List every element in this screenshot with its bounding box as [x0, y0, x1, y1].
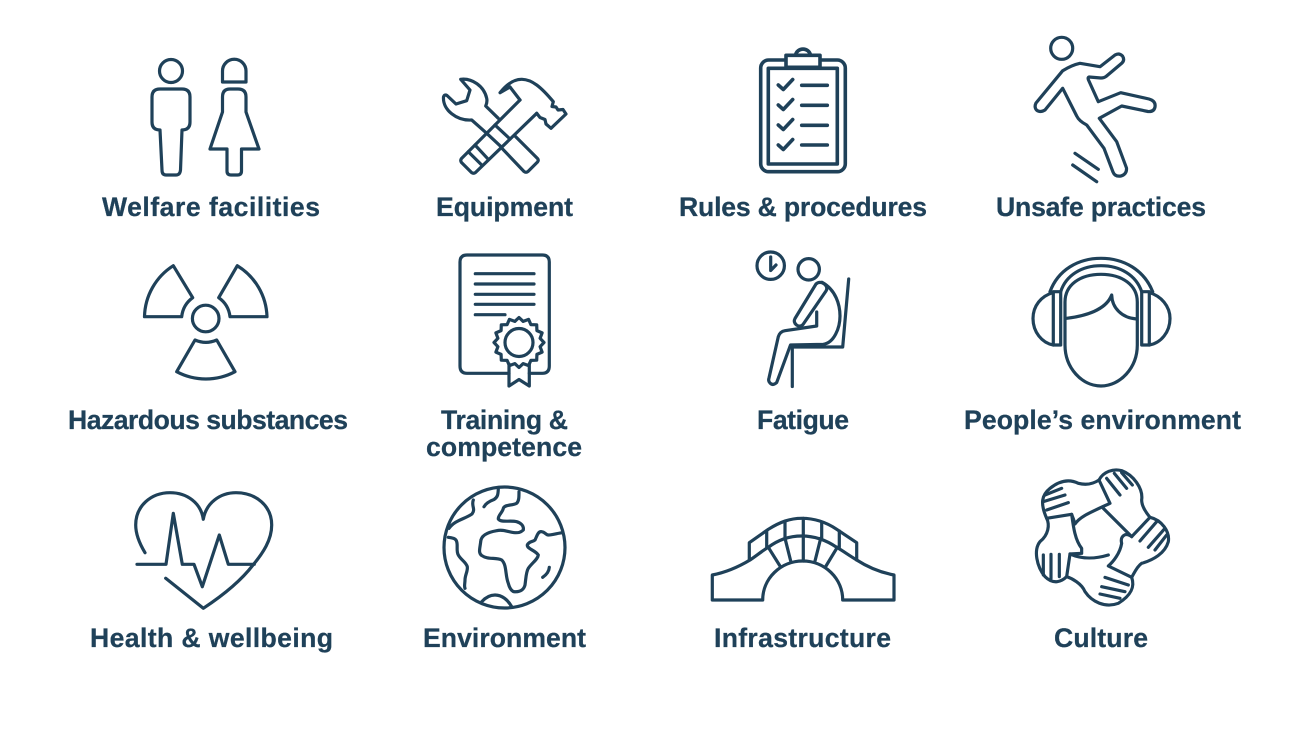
icon: heart with pulse line — [136, 493, 272, 608]
icon: wrench and hammer — [443, 79, 566, 173]
icon: radiation symbol — [144, 266, 267, 379]
icon: slipping figure — [1035, 37, 1155, 182]
label: unsafe practices: Unsafe practices — [996, 192, 1206, 222]
panel: hazardous substances — [68, 266, 348, 435]
panel: training and competence — [426, 255, 582, 462]
icon: certificate with seal — [460, 255, 549, 386]
panel: rules and procedures — [679, 49, 927, 222]
panel: environment — [423, 487, 586, 653]
label: people's environment: People’s environment — [964, 405, 1241, 435]
icon: man and woman — [152, 59, 259, 175]
label: fatigue: Fatigue — [757, 405, 849, 435]
icon: five linked hands — [1036, 470, 1169, 605]
icon: seated tired person with clock — [757, 252, 849, 386]
icon: face with ear defenders — [1033, 258, 1170, 386]
label: equipment: Equipment — [436, 192, 573, 222]
panel: infrastructure — [712, 518, 894, 653]
label: health and wellbeing: Health & wellbeing — [90, 623, 333, 653]
label: welfare facilities: Welfare facilities — [102, 192, 320, 222]
label: training and competence, line one: Training & — [441, 405, 568, 435]
icon: clipboard checklist — [761, 49, 845, 172]
panel: fatigue — [757, 252, 849, 435]
panel: welfare facilities — [102, 59, 320, 222]
panel: unsafe practices — [996, 37, 1206, 222]
panel: health and wellbeing — [90, 493, 333, 653]
label: rules and procedures: Rules & procedures — [679, 192, 927, 222]
label: infrastructure: Infrastructure — [714, 623, 891, 653]
icon: globe — [444, 487, 565, 608]
label: training and competence, line two: competence — [426, 432, 582, 462]
label: hazardous substances: Hazardous substances — [68, 405, 348, 435]
panel: people's environment — [964, 258, 1241, 435]
label: culture: Culture — [1054, 623, 1148, 653]
label: environment: Environment — [423, 623, 586, 653]
panel: equipment — [436, 79, 573, 222]
panel: culture — [1036, 470, 1169, 653]
icon: arched bridge — [712, 518, 894, 600]
